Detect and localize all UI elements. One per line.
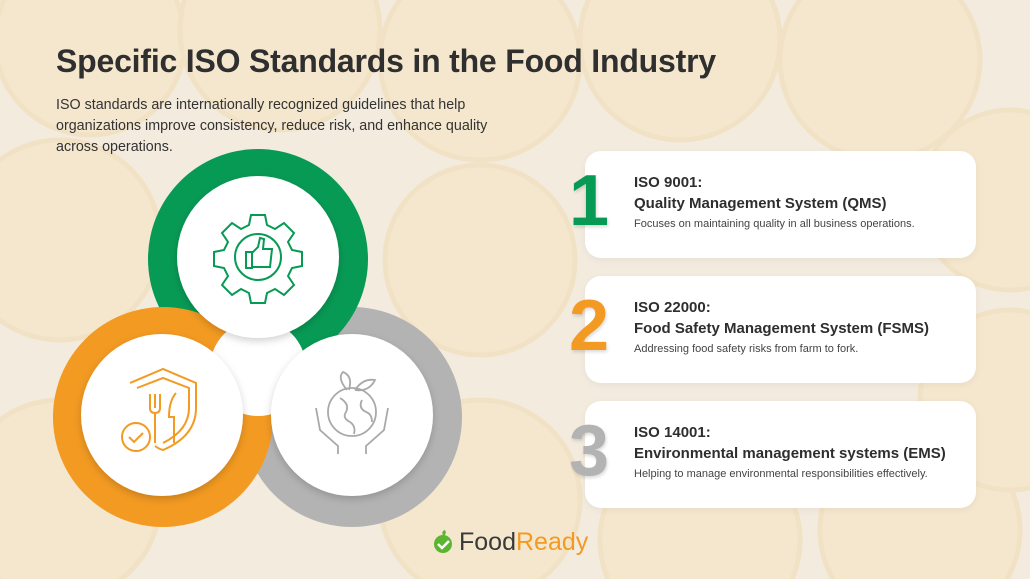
number 3: 3 xyxy=(569,411,609,491)
icon: hands holding globe xyxy=(316,372,388,454)
card 1: Quality Management System (QMS) xyxy=(634,195,887,212)
card 1: ISO 9001: xyxy=(634,174,702,191)
card 2: Addressing food safety risks from farm to fork. xyxy=(634,343,858,355)
subtitle: ISO standards are internationally recognized guidelines that help organizations improve consistency, reduce risk, and enhance quality across operations. xyxy=(56,97,487,155)
card 2: Food Safety Management System (FSMS) xyxy=(634,320,929,337)
card 1: Focuses on maintaining quality in all business operations. xyxy=(634,218,915,230)
logo: FoodReady xyxy=(459,528,588,556)
card 1 xyxy=(585,151,976,258)
card 2: ISO 22000: xyxy=(634,299,711,316)
icon: gear thumbs up xyxy=(214,215,302,303)
icon: shield fork knife check xyxy=(122,369,196,451)
card 3: Environmental management systems (EMS) xyxy=(634,445,946,462)
card 3: Helping to manage environmental responsibilities effectively. xyxy=(634,468,928,480)
number 2: 2 xyxy=(569,286,609,366)
card 3: ISO 14001: xyxy=(634,424,711,441)
card 3 xyxy=(585,401,976,508)
number 1: 1 xyxy=(569,161,609,241)
card 2 xyxy=(585,276,976,383)
diagram: three rings xyxy=(53,149,462,527)
title: Specific ISO Standards in the Food Industry xyxy=(56,43,716,79)
